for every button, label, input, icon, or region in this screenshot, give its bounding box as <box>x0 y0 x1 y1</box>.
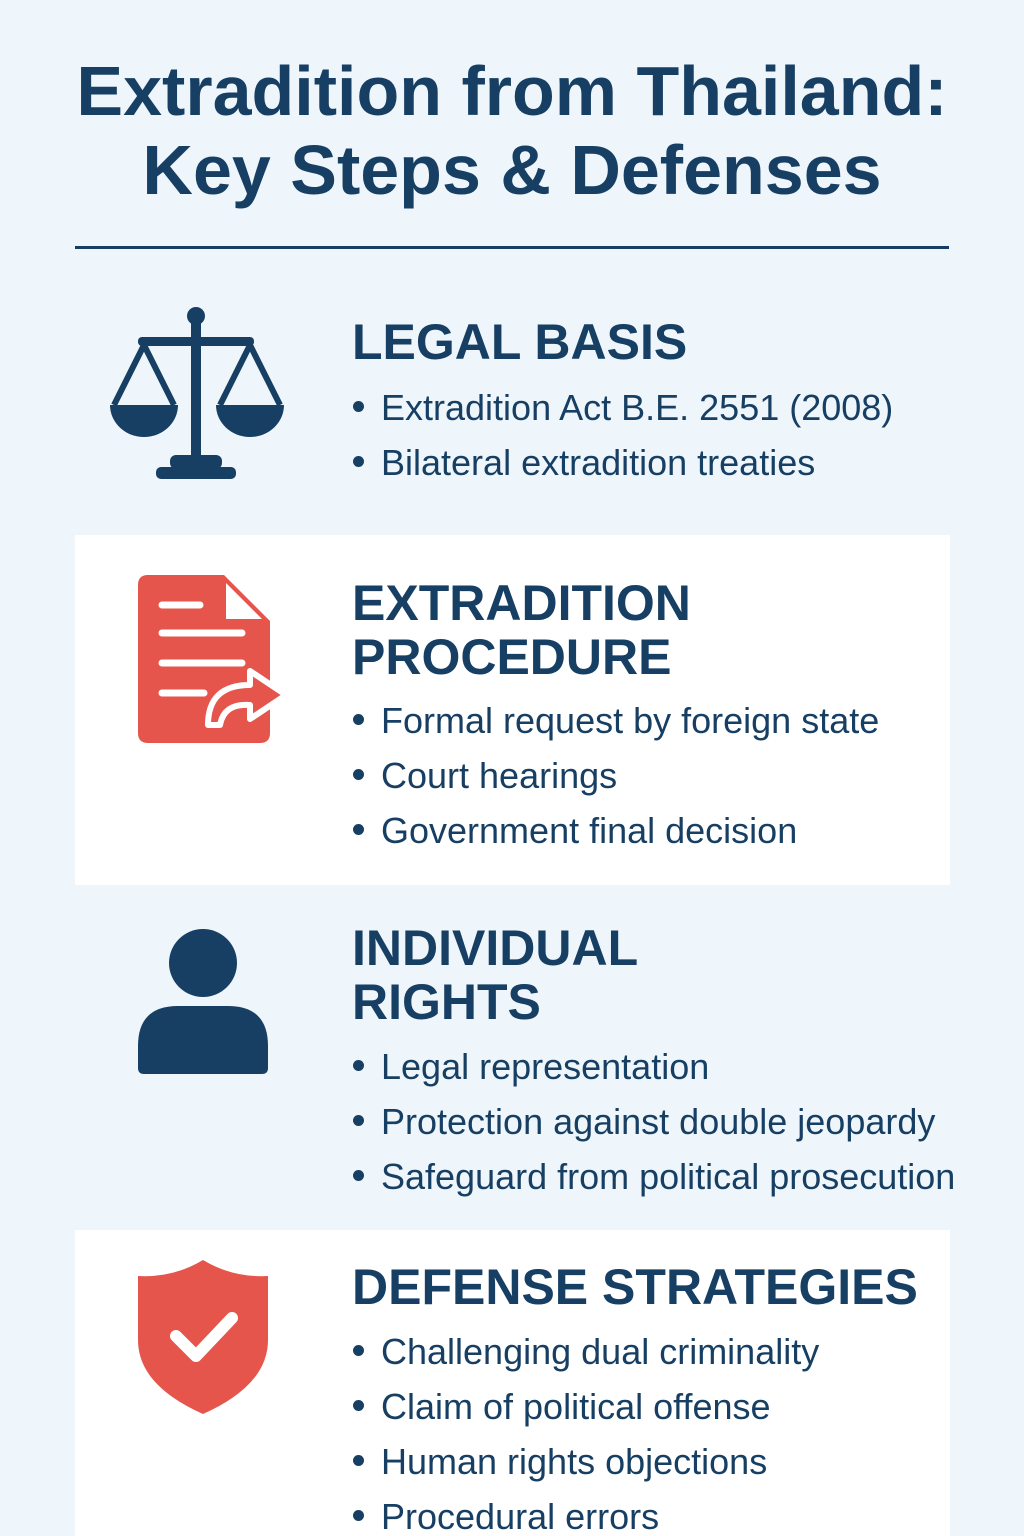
title: Key Steps & Defenses <box>142 131 882 209</box>
bullets: procedure: Government final decision <box>381 810 797 851</box>
heading: defense strategies: DEFENSE STRATEGIES <box>352 1259 918 1315</box>
heading: extradition procedure: PROCEDURE <box>352 629 671 685</box>
bullets: defense: Challenging dual criminality <box>381 1331 819 1372</box>
icon: person <box>138 929 268 1074</box>
bullets: defense <box>353 1331 820 1536</box>
bullets: procedure: Formal request by foreign state <box>381 700 879 741</box>
bullets: rights <box>353 1046 955 1197</box>
panel: extradition procedure background <box>75 535 950 885</box>
heading: extradition procedure <box>352 575 691 685</box>
bullets: rights: Protection against double jeopardy <box>381 1101 935 1142</box>
heading: individual rights: INDIVIDUAL <box>352 920 638 976</box>
bullets: defense: Claim of political offense <box>381 1386 771 1427</box>
bullets: defense: Human rights objections <box>381 1441 767 1482</box>
icon: scales <box>110 307 284 479</box>
bullets: legal basis: Extradition Act B.E. 2551 (2008) <box>381 387 893 428</box>
heading: extradition procedure: EXTRADITION <box>352 575 691 631</box>
title <box>76 52 948 209</box>
panel: defense strategies background <box>75 1230 950 1536</box>
icon: document with arrow <box>138 575 281 743</box>
bullets: procedure: Court hearings <box>381 755 617 796</box>
heading: individual rights: RIGHTS <box>352 974 541 1030</box>
heading: legal basis: LEGAL BASIS <box>352 314 687 370</box>
bullets: rights: Legal representation <box>381 1046 709 1087</box>
bullets: legal basis: Bilateral extradition treaties <box>381 442 815 483</box>
title: Extradition from Thailand: <box>76 52 948 130</box>
bullets: rights: Safeguard from political prosecution <box>381 1156 955 1197</box>
bullets: legal basis <box>353 387 893 483</box>
heading: individual rights <box>352 920 638 1030</box>
bullets: procedure <box>353 700 879 851</box>
icon: shield check <box>138 1260 268 1414</box>
bullets: defense: Procedural errors <box>381 1496 659 1536</box>
